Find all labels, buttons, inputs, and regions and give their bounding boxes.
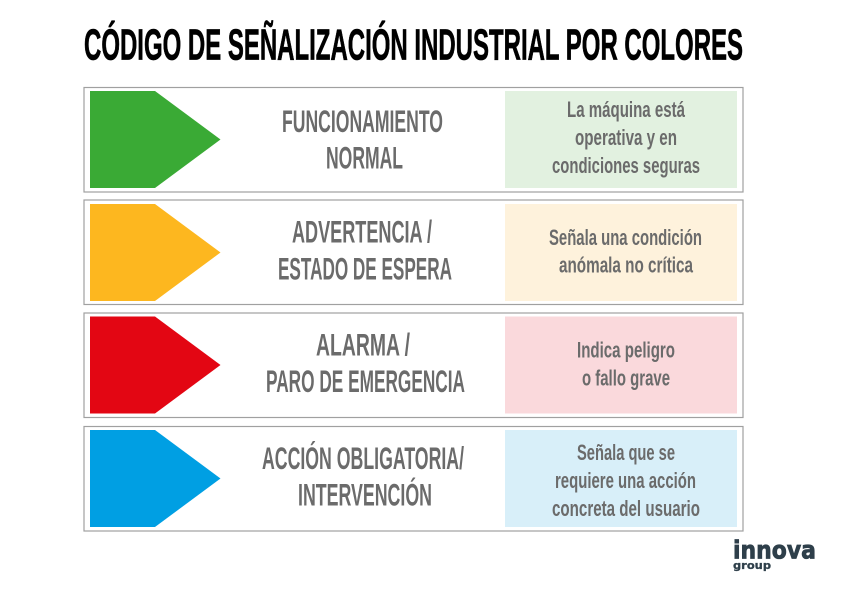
description box: amber: Señala una condición: [549, 225, 702, 250]
logo: innova group: group: [733, 559, 771, 572]
label: advertencia: ADVERTENCIA /: [292, 214, 432, 250]
label: acción obligatoria: INTERVENCIÓN: [298, 476, 432, 512]
description box: green: [505, 91, 737, 188]
description box: green: condiciones seguras: [552, 153, 700, 178]
description box: amber: anómala no crítica: [559, 253, 694, 278]
icon: green arrow: [90, 91, 220, 188]
label: funcionamiento normal: NORMAL: [326, 140, 403, 176]
description box: red: Indica peligro: [577, 338, 675, 362]
description box: amber: [505, 204, 737, 301]
label: acción obligatoria: ACCIÓN OBLIGATORIA/: [262, 440, 464, 476]
logo: innova group: innova: [733, 536, 816, 564]
label: funcionamiento normal: [282, 103, 443, 176]
panel: acción obligatoria: [84, 426, 743, 531]
label: advertencia: [278, 214, 452, 286]
label: acción obligatoria: [262, 440, 464, 512]
description box: red: [505, 316, 737, 414]
label: alarma: ALARMA /: [316, 326, 410, 362]
panel: funcionamiento normal: [84, 88, 743, 192]
icon: amber arrow: [90, 204, 220, 301]
label: funcionamiento normal: FUNCIONAMIENTO: [282, 103, 443, 139]
description box: green: La máquina está: [567, 97, 686, 122]
panel: alarma: [84, 313, 743, 418]
label: alarma: PARO DE EMERGENCIA: [266, 363, 465, 399]
label: advertencia: ESTADO DE ESPERA: [278, 250, 452, 286]
description box: green: operativa y en: [575, 125, 677, 150]
icon: red arrow: [90, 316, 220, 414]
description box: blue: Señala que se: [577, 440, 675, 465]
description box: blue: [505, 430, 737, 527]
description box: blue: requiere una acción: [555, 468, 696, 493]
icon: blue arrow: [90, 430, 220, 527]
panel: advertencia: [84, 200, 743, 304]
label: alarma: [266, 326, 465, 399]
description box: blue: concreta del usuario: [552, 496, 700, 521]
description box: red: o fallo grave: [582, 366, 670, 390]
